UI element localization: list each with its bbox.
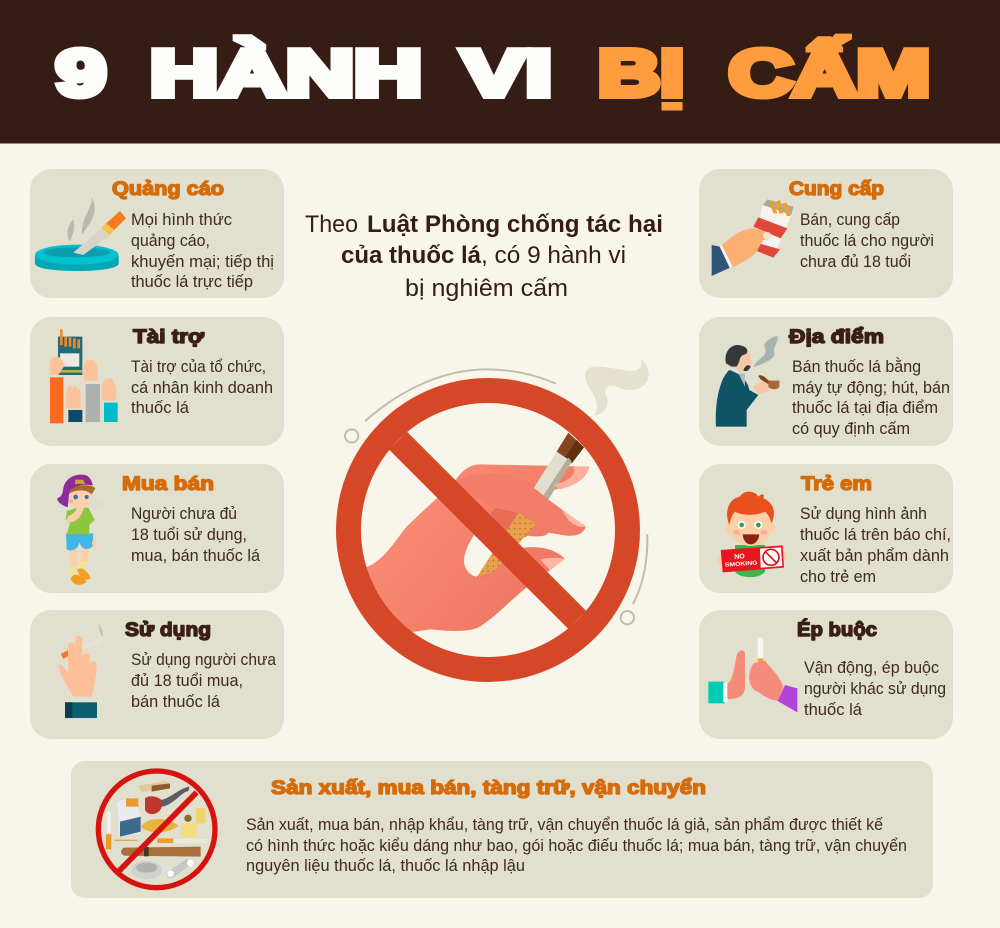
intro text: bị nghiêm cấm xyxy=(405,275,568,302)
cigarette xyxy=(557,433,584,463)
icon: child with no smoking sign xyxy=(717,492,787,577)
text block: Sử dụng người chưa xyxy=(131,650,276,669)
icon: hand holding cigarette xyxy=(58,622,103,718)
intro text xyxy=(305,211,663,302)
text block: thuốc lá trực tiếp xyxy=(131,272,253,291)
text block: khuyến mại; tiếp thị xyxy=(131,252,274,271)
text block: xuất bản phẩm dành xyxy=(800,546,949,565)
text block xyxy=(804,658,946,719)
text block: người khác sử dụng xyxy=(804,679,946,698)
icon: hand offering cigarettes xyxy=(712,199,793,276)
text block: Vận động, ép buộc xyxy=(804,658,939,677)
text block: Tài trợ của tổ chức, xyxy=(131,357,266,376)
text block: có quy định cấm xyxy=(792,419,910,438)
header band xyxy=(0,0,1000,144)
text block: Sử dụng hình ảnh xyxy=(800,504,927,523)
text block: bán thuốc lá xyxy=(131,692,221,711)
icon: prohibited tobacco products xyxy=(98,771,215,888)
sign: NO xyxy=(734,553,745,561)
text block: cá nhân kinh doanh xyxy=(131,378,273,397)
text block: có hình thức hoặc kiểu dáng như bao, gói hoặc điếu thuốc lá; mua bán, tàng trữ, vận chuyển xyxy=(246,837,907,855)
index finger xyxy=(453,474,586,536)
intro text: Luật Phòng chống tác hại xyxy=(367,211,663,238)
text block xyxy=(131,210,274,291)
heading: Sản xuất, mua bán, tàng trữ, vận chuyển xyxy=(271,778,706,799)
panel: Địa điểm xyxy=(699,317,953,446)
text block: quảng cáo, xyxy=(131,231,210,250)
icon: man with pipe xyxy=(716,336,779,427)
intro text: Theo xyxy=(305,211,358,238)
text block xyxy=(800,504,951,586)
text block: Mọi hình thức xyxy=(131,210,232,229)
title xyxy=(56,36,930,110)
text block: cho trẻ em xyxy=(800,567,876,586)
text block: Sản xuất, mua bán, nhập khẩu, tàng trữ, vận chuyển thuốc lá giả, sản phẩm được thiết kế xyxy=(246,816,883,834)
text block xyxy=(800,210,934,271)
panel: Sử dụng xyxy=(30,610,284,739)
icon: refusing hand and offering hand xyxy=(708,638,797,712)
icon: ashtray xyxy=(35,197,126,271)
text block xyxy=(131,357,273,417)
text block: máy tự động; hút, bán xyxy=(792,378,950,397)
text block: thuốc lá xyxy=(131,398,190,417)
panel: Quảng cáo xyxy=(30,169,284,298)
icon: boy smoking xyxy=(57,475,106,585)
text block: nguyên liệu thuốc lá, thuốc lá nhập lậu xyxy=(246,857,525,875)
text block: 18 tuổi sử dụng, xyxy=(131,525,247,544)
text block: đủ 18 tuổi mua, xyxy=(131,671,243,690)
sign: SMOKING xyxy=(725,560,758,569)
text block: Người chưa đủ xyxy=(131,504,237,523)
heading: Quảng cáo xyxy=(112,179,224,200)
prohibition ring xyxy=(348,390,627,669)
panel: Trẻ em xyxy=(699,464,953,593)
panel: Cung cấp xyxy=(699,169,953,298)
text block xyxy=(792,357,950,438)
intro text: , có 9 hành vi xyxy=(481,242,626,269)
heading: Mua bán xyxy=(122,474,214,495)
title: 9 xyxy=(56,36,106,110)
title: BỊ xyxy=(598,36,684,110)
central no-smoking sign xyxy=(345,359,649,669)
hand xyxy=(363,464,589,633)
panel: Tài trợ xyxy=(30,317,284,446)
panel: Sản xuất, mua bán, tàng trữ, vận chuyển xyxy=(71,761,933,898)
heading: Sử dụng xyxy=(125,620,211,641)
decorative arcs xyxy=(345,369,647,624)
text block xyxy=(131,650,276,711)
text block xyxy=(246,816,907,875)
text block: Bán, cung cấp xyxy=(800,210,900,229)
text block xyxy=(131,504,261,565)
smoke xyxy=(585,359,649,416)
text block: thuốc lá tại địa điểm xyxy=(792,398,938,417)
text block: thuốc lá trên báo chí, xyxy=(800,525,951,544)
prohibition slash xyxy=(398,441,577,620)
intro text: của thuốc lá xyxy=(341,242,481,269)
heading: Ép buộc xyxy=(797,619,877,641)
icon: hands and cigarette pack xyxy=(49,329,118,423)
text block: mua, bán thuốc lá xyxy=(131,546,261,565)
title: CẤM xyxy=(729,36,930,110)
gap between fingers xyxy=(464,513,527,577)
panel: Mua bán xyxy=(30,464,284,593)
panel: Ép buộc xyxy=(699,610,953,739)
title: HÀNH xyxy=(150,36,422,110)
heading: Địa điểm xyxy=(789,327,884,348)
heading: Trẻ em xyxy=(801,474,872,495)
heading: Cung cấp xyxy=(789,179,884,200)
text block: thuốc lá cho người xyxy=(800,231,934,250)
text block: thuốc lá xyxy=(804,700,863,719)
text block: chưa đủ 18 tuổi xyxy=(800,252,911,271)
title: VI xyxy=(462,36,552,110)
heading: Tài trợ xyxy=(133,327,205,348)
sign xyxy=(721,545,784,572)
text block: Bán thuốc lá bằng xyxy=(792,357,921,376)
